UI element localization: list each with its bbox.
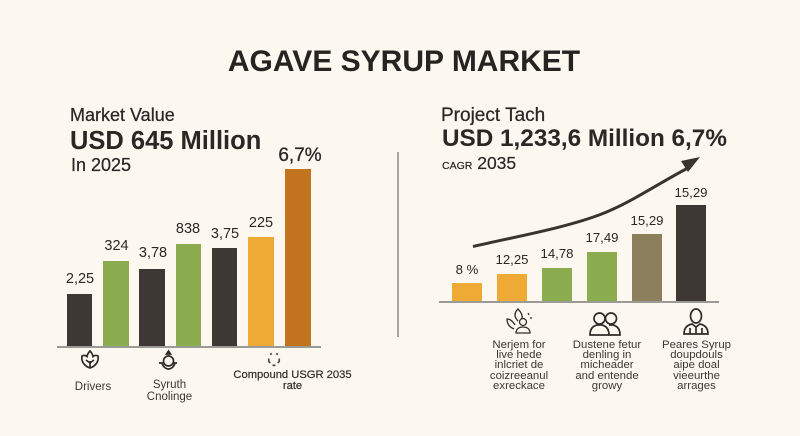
value: USD 1,233,6 million 6,7%: USD 1,233,6 Million 6,7%: [442, 125, 727, 152]
icon: cycle: [159, 350, 177, 370]
bar chart: market value: [57, 145, 322, 348]
label 6: 225: [249, 215, 273, 231]
label 4: 17,49: [585, 230, 619, 245]
text: compound rate: Compound USGR 2035 rate: [233, 369, 352, 392]
text: drivers: Drivers: [75, 381, 111, 393]
label 3: 3,78: [139, 245, 167, 261]
bar 1: [452, 283, 482, 301]
label 6: 15,29: [674, 185, 708, 200]
bar 5: [212, 248, 237, 346]
value: USD 645 million: USD 645 Million: [70, 127, 261, 155]
icon: two people: [589, 312, 621, 336]
axis: [57, 346, 321, 348]
text: syruth cnolinge: Syruth Cnolinge: [147, 378, 192, 402]
text: CAGR 2035: CAGR 2035: [442, 153, 516, 173]
label 5: 3,75: [211, 226, 239, 242]
bar 2: [497, 274, 527, 301]
panel: market value: [57, 105, 352, 402]
bar 4: [587, 252, 617, 301]
label 4: 838: [176, 221, 200, 237]
label 2: 324: [104, 238, 129, 254]
divider: [397, 152, 398, 337]
bar 2: [103, 261, 129, 346]
bar 3: [139, 269, 165, 346]
bar 3: [542, 268, 572, 301]
text: in 2025: In 2025: [71, 155, 131, 175]
label 3: 14,78: [540, 246, 574, 261]
icon: dashed ring: [268, 352, 280, 366]
text: peares syrup: Peares Syrup doupdouls aipe doal vieeurthe arrages: [662, 339, 731, 392]
label 2: 12,25: [495, 252, 529, 267]
bar chart: projection: [439, 185, 719, 303]
icon: plant and person: [506, 308, 532, 334]
arrow: growth: [472, 157, 700, 248]
heading: market value: Market Value: [70, 105, 175, 125]
bar 5: [632, 234, 662, 301]
label 5: 15,29: [630, 213, 664, 228]
label 7: 6,7%: [278, 145, 322, 166]
label 1: 2,25: [66, 271, 94, 287]
bar 7: [285, 169, 311, 346]
heading: project tach: Project Tach: [441, 105, 545, 126]
panel: projection: [439, 105, 731, 392]
icon: businessperson: [683, 308, 709, 335]
label 1: 8 %: [456, 262, 478, 277]
icon: leaf: [80, 350, 100, 369]
axis: [439, 301, 719, 302]
text: dustene: Dustene fetur denling in micheader and entende growy: [573, 339, 641, 392]
bar 1: [67, 294, 92, 346]
bar 6: [248, 237, 274, 346]
bar 4: [176, 244, 201, 346]
bar 6: [676, 205, 706, 301]
title: AGAVE SYRUP MARKET: [228, 45, 580, 78]
text: nerjem: Nerjem for live hede inlcriet de coizreeanul exreckace: [490, 339, 548, 392]
